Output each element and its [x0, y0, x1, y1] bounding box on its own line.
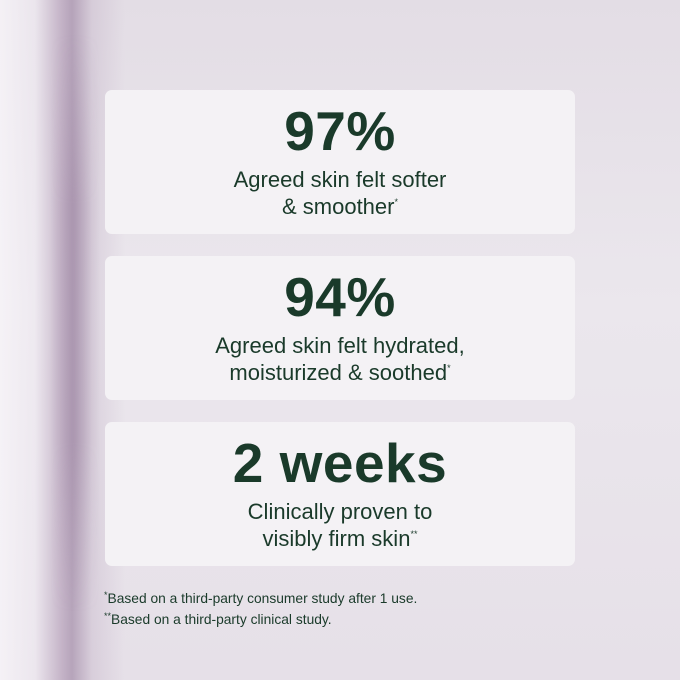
- card: 97%: [105, 90, 575, 234]
- stat number: 2 weeks: [233, 432, 447, 494]
- card: 94%: [105, 256, 575, 400]
- stat description: [248, 499, 432, 551]
- stat description: [215, 333, 465, 385]
- stat description: Agreed skin felt softer: [234, 167, 446, 192]
- background swoosh shadow: [58, 106, 94, 542]
- footnote 1: *Based on a third-party consumer study after 1 use.: [104, 590, 417, 606]
- stat description: Clinically proven to: [248, 499, 432, 524]
- stat description: Agreed skin felt hydrated,: [215, 333, 465, 358]
- stat number: 97%: [284, 100, 396, 162]
- background swoosh: [0, 0, 140, 680]
- stat number: 94%: [284, 266, 396, 328]
- card: 2 weeks: [105, 422, 575, 566]
- stat description: moisturized & soothed*: [229, 360, 451, 385]
- stat description: visibly firm skin**: [263, 526, 417, 551]
- stat description: & smoother*: [282, 194, 398, 219]
- footnote 2: **Based on a third-party clinical study.: [104, 611, 332, 627]
- stat description: [234, 167, 446, 219]
